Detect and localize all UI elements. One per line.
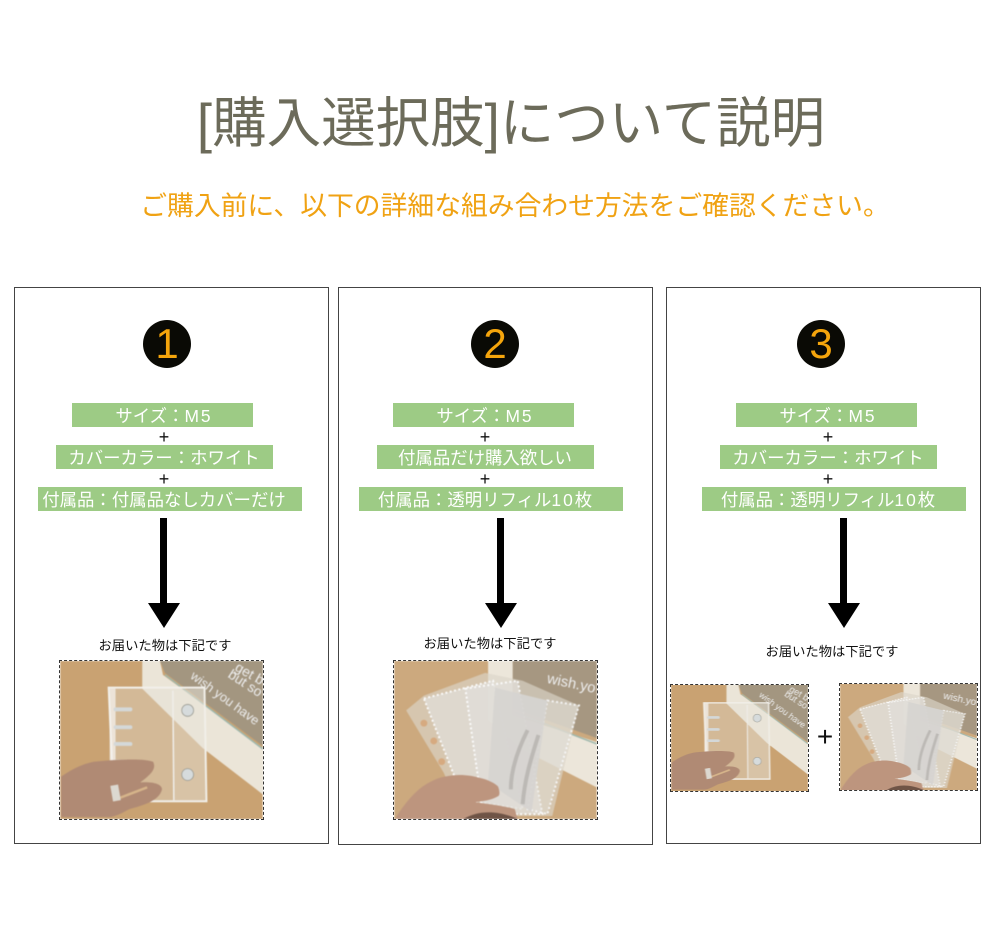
- option 2 label: size: サイズ：M5: [436, 406, 534, 426]
- caption 1: お届いた物は下記です: [99, 638, 231, 653]
- title: [購入選択肢]について説明: [197, 93, 825, 154]
- plus: +: [159, 427, 169, 447]
- arrow 2: [485, 518, 517, 628]
- arrow 1: [148, 518, 180, 628]
- subtitle: ご購入前に、以下の詳細な組み合わせ方法をご確認ください。: [140, 191, 890, 221]
- photo: option 3 binder cover: wish you have: [757, 689, 808, 730]
- photo: transparent refills: wish.yo: [545, 671, 597, 697]
- panel: option 3: [666, 287, 981, 844]
- option 3 label: cover colour: カバーカラー：ホワイト: [732, 448, 924, 468]
- photo: option 3 binder cover: [670, 684, 809, 792]
- plus: +: [480, 469, 490, 489]
- option 1 label: accessory: 付属品：付属品なしカバーだけ: [42, 490, 286, 510]
- photo: clear binder cover: wish you have: [187, 667, 262, 728]
- option 2 label: size: [393, 403, 574, 427]
- plus: +: [480, 427, 490, 447]
- arrow 3: [828, 518, 860, 628]
- caption 2: お届いた物は下記です: [424, 636, 556, 651]
- plus: +: [823, 427, 833, 447]
- photo: option 3 refills: [839, 683, 978, 791]
- caption 3: お届いた物は下記です: [766, 644, 898, 659]
- plus: +: [159, 469, 169, 489]
- number badge 1: [143, 320, 191, 368]
- option 3 label: accessory: [702, 487, 966, 511]
- number badge 2: 2: [483, 320, 507, 367]
- number badge 3: 3: [809, 320, 833, 367]
- option 2 label: accessory: 付属品：透明リフィル10枚: [378, 490, 592, 510]
- option 2 label: accessory only: [377, 445, 594, 469]
- panel: option 2: [338, 287, 653, 845]
- option 2 label: accessory: [359, 487, 623, 511]
- option 3 label: size: サイズ：M5: [779, 406, 877, 426]
- option 1 label: size: [72, 403, 253, 427]
- plus: +: [823, 469, 833, 489]
- number badge 1: 1: [155, 320, 179, 367]
- option 2 label: accessory only: 付属品だけ購入欲しい: [398, 448, 572, 468]
- option 1 label: cover colour: カバーカラー：ホワイト: [68, 448, 260, 468]
- option 3 label: accessory: 付属品：透明リフィル10枚: [721, 490, 935, 510]
- panel: option 1: [14, 287, 329, 844]
- photo: transparent refills: [393, 660, 598, 820]
- photo: option 3 binder cover: but so: [783, 689, 809, 711]
- number badge 3: [797, 320, 845, 368]
- option 3 label: size: [736, 403, 917, 427]
- photo: clear binder cover: [59, 660, 264, 820]
- option 1 label: size: サイズ：M5: [115, 406, 213, 426]
- photo: option 3 refills: wish.yo: [941, 691, 978, 708]
- number badge 2: [471, 320, 519, 368]
- plus between photos: +: [817, 721, 833, 752]
